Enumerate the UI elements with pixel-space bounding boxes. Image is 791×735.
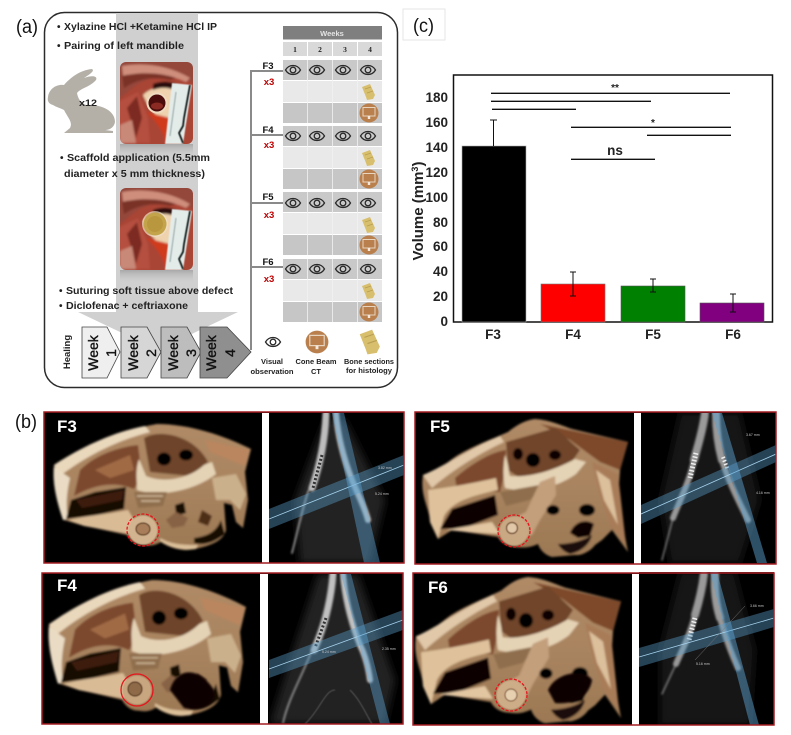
group: F5 schedule: x3 bbox=[264, 210, 274, 221]
icon: rabbit bbox=[48, 69, 115, 133]
icon: rabbit: x12 bbox=[79, 98, 97, 108]
defect marker bbox=[496, 680, 526, 710]
y axis title: Volume (mm bbox=[410, 172, 427, 260]
CT slice F6: 3.66 mm bbox=[750, 604, 764, 608]
label F5: F5 bbox=[430, 417, 450, 436]
table header: weeks bbox=[283, 26, 382, 56]
panel border bbox=[415, 412, 776, 564]
bar: F4 bbox=[541, 284, 605, 322]
group: F5 schedule bbox=[262, 192, 382, 255]
legend: bone sections: for histology bbox=[346, 366, 393, 375]
divider bbox=[262, 413, 269, 563]
significance labels: ns bbox=[607, 143, 623, 158]
divider bbox=[632, 574, 639, 725]
y axis ticks: 40 bbox=[433, 264, 448, 279]
table header: weeks: 4 bbox=[368, 45, 372, 54]
group: F3 schedule: x3 bbox=[264, 77, 274, 88]
text: scaffold application: • bbox=[60, 153, 64, 164]
panel: F6 scans bbox=[413, 571, 774, 725]
CT slice F3: 3.82 mm bbox=[378, 466, 392, 470]
group: F4 schedule bbox=[262, 125, 382, 189]
legend: bone sections: Bone sections bbox=[344, 357, 394, 366]
defect marker bbox=[122, 676, 152, 704]
photo: mandible defect bbox=[118, 60, 195, 146]
photo reflection bbox=[120, 270, 193, 284]
legend: cone beam CT: CT bbox=[311, 367, 321, 376]
label (c) bbox=[403, 9, 445, 40]
chevron: week 3 bbox=[161, 327, 201, 378]
significance lines bbox=[491, 93, 731, 159]
skull render F6 bbox=[415, 577, 621, 723]
y axis ticks: 100 bbox=[425, 190, 448, 205]
y axis title: ) bbox=[410, 162, 427, 167]
y axis ticks: 140 bbox=[425, 140, 448, 155]
chevron: week 3: Week bbox=[165, 334, 181, 371]
label (b): (b) bbox=[15, 412, 37, 433]
group: F5 schedule: F5 bbox=[262, 192, 274, 203]
legend: visual observation: observation bbox=[250, 367, 294, 376]
CT slice F4: 5.24 mm bbox=[322, 650, 336, 654]
group: F4 schedule: F4 bbox=[262, 125, 274, 136]
legend: visual observation bbox=[250, 338, 294, 376]
defect marker bbox=[128, 516, 158, 544]
x axis labels: F5 bbox=[645, 327, 661, 342]
chevron: week 1: 1 bbox=[103, 349, 119, 357]
label (a): (a) bbox=[16, 17, 38, 38]
x axis labels: F3 bbox=[485, 327, 501, 342]
bar: F3 bbox=[462, 146, 526, 322]
legend: cone beam CT bbox=[296, 331, 337, 376]
group: F6 schedule: x3 bbox=[264, 274, 274, 285]
defect marker bbox=[500, 516, 528, 546]
table header: weeks: 3 bbox=[343, 45, 347, 54]
CT slice F6: 5.16 mm bbox=[696, 662, 710, 666]
CT slice F4: 2.35 mm bbox=[382, 647, 396, 651]
CT slice F6 bbox=[639, 571, 774, 725]
x axis labels: F6 bbox=[725, 327, 741, 342]
chevron: week 4: Week bbox=[203, 334, 219, 371]
CT slice F4 bbox=[269, 574, 403, 724]
text: healing: Healing bbox=[62, 335, 73, 369]
x axis labels: F4 bbox=[565, 327, 581, 342]
legend: bone sections bbox=[344, 330, 394, 375]
chevron: week 2: Week bbox=[125, 334, 141, 371]
photo reflection bbox=[120, 144, 193, 158]
CT slice F5 bbox=[641, 413, 776, 563]
table header: weeks: Weeks bbox=[320, 29, 344, 38]
chevron: week 4: 4 bbox=[222, 349, 238, 357]
text: anesthesia steps: Pairing of left mandible bbox=[64, 41, 184, 52]
chart frame bbox=[454, 75, 772, 322]
error bars bbox=[490, 120, 736, 312]
y axis ticks: 60 bbox=[433, 239, 448, 254]
skull render F5 bbox=[422, 419, 628, 557]
CT slice F5: 4.16 mm bbox=[756, 491, 770, 495]
group: F3 schedule: F3 bbox=[262, 61, 274, 72]
divider bbox=[634, 413, 641, 564]
chevron: week 4 bbox=[200, 327, 251, 378]
text: post-operative care: • bbox=[59, 286, 63, 297]
legend: visual observation: Visual bbox=[261, 357, 283, 366]
table header: weeks: 1 bbox=[293, 45, 297, 54]
chevron: week 2: 2 bbox=[143, 349, 159, 357]
panel border bbox=[413, 573, 774, 725]
label F4: F4 bbox=[57, 576, 77, 595]
y axis ticks: 160 bbox=[425, 115, 448, 130]
chevron: week 3: 3 bbox=[183, 349, 199, 357]
panel border bbox=[42, 573, 403, 724]
chevron: week 2 bbox=[121, 327, 161, 378]
chevron: week 1: Week bbox=[85, 334, 101, 371]
y axis ticks: 180 bbox=[425, 90, 448, 105]
group: F6 schedule: F6 bbox=[262, 257, 274, 268]
panel border bbox=[44, 412, 404, 563]
y axis ticks: 0 bbox=[440, 314, 448, 329]
significance labels: * bbox=[651, 118, 655, 129]
y axis ticks bbox=[425, 90, 448, 329]
panel: F5 scans bbox=[415, 412, 776, 564]
group: F4 schedule: x3 bbox=[264, 140, 274, 151]
label F3: F3 bbox=[57, 417, 77, 436]
significance labels bbox=[607, 83, 655, 158]
y axis title: 3 bbox=[410, 167, 420, 172]
x axis labels bbox=[485, 327, 741, 342]
skull render F3 bbox=[54, 424, 251, 550]
panel: F4 scans bbox=[42, 573, 403, 724]
text: anesthesia steps: • bbox=[57, 41, 61, 52]
table header: weeks: 2 bbox=[318, 45, 322, 54]
photo: scaffold in defect bbox=[118, 186, 195, 272]
text: scaffold application: diameter x 5 mm thickness) bbox=[64, 169, 205, 180]
chevron: week 1 bbox=[82, 327, 120, 378]
text: anesthesia steps: • bbox=[57, 22, 61, 33]
bar: F5 bbox=[621, 286, 685, 322]
text: post-operative care: • bbox=[59, 301, 63, 312]
CT slice F5: 3.67 mm bbox=[746, 433, 760, 437]
panel: F3 scans bbox=[44, 412, 404, 563]
dark cavity F4 bbox=[170, 672, 215, 709]
arrow: surgery timeline bbox=[78, 13, 238, 350]
y axis ticks: 80 bbox=[433, 215, 448, 230]
group: F3 schedule bbox=[262, 60, 382, 123]
dark cavity F6 bbox=[548, 673, 592, 703]
group: F6 schedule bbox=[262, 257, 382, 322]
y axis ticks: 120 bbox=[425, 165, 448, 180]
CT slice F3 bbox=[269, 413, 404, 563]
label (c): (c) bbox=[413, 16, 434, 37]
text: anesthesia steps bbox=[57, 22, 217, 52]
text: anesthesia steps: Xylazine HCl +Ketamine HCl IP bbox=[64, 22, 217, 33]
skull render F4 bbox=[49, 580, 246, 716]
CT slice F3: 5.24 mm bbox=[375, 492, 389, 496]
significance labels: ** bbox=[611, 83, 619, 94]
bar: F6 bbox=[700, 303, 764, 322]
y axis ticks: 20 bbox=[433, 289, 448, 304]
panel: study design bbox=[44, 12, 398, 388]
divider bbox=[260, 574, 268, 724]
text: post-operative care: Diclofenac + ceftriaxone bbox=[66, 301, 188, 312]
text: post-operative care: Suturing soft tissue above defect bbox=[66, 286, 234, 297]
legend: cone beam CT: Cone Beam bbox=[296, 357, 337, 366]
text: scaffold application: Scaffold application (5.5mm bbox=[67, 153, 210, 164]
text: scaffold application bbox=[60, 153, 210, 180]
text: post-operative care bbox=[59, 286, 234, 312]
branch connector bbox=[251, 71, 283, 350]
bar chart: volume bbox=[410, 75, 772, 342]
label F6: F6 bbox=[428, 578, 448, 597]
